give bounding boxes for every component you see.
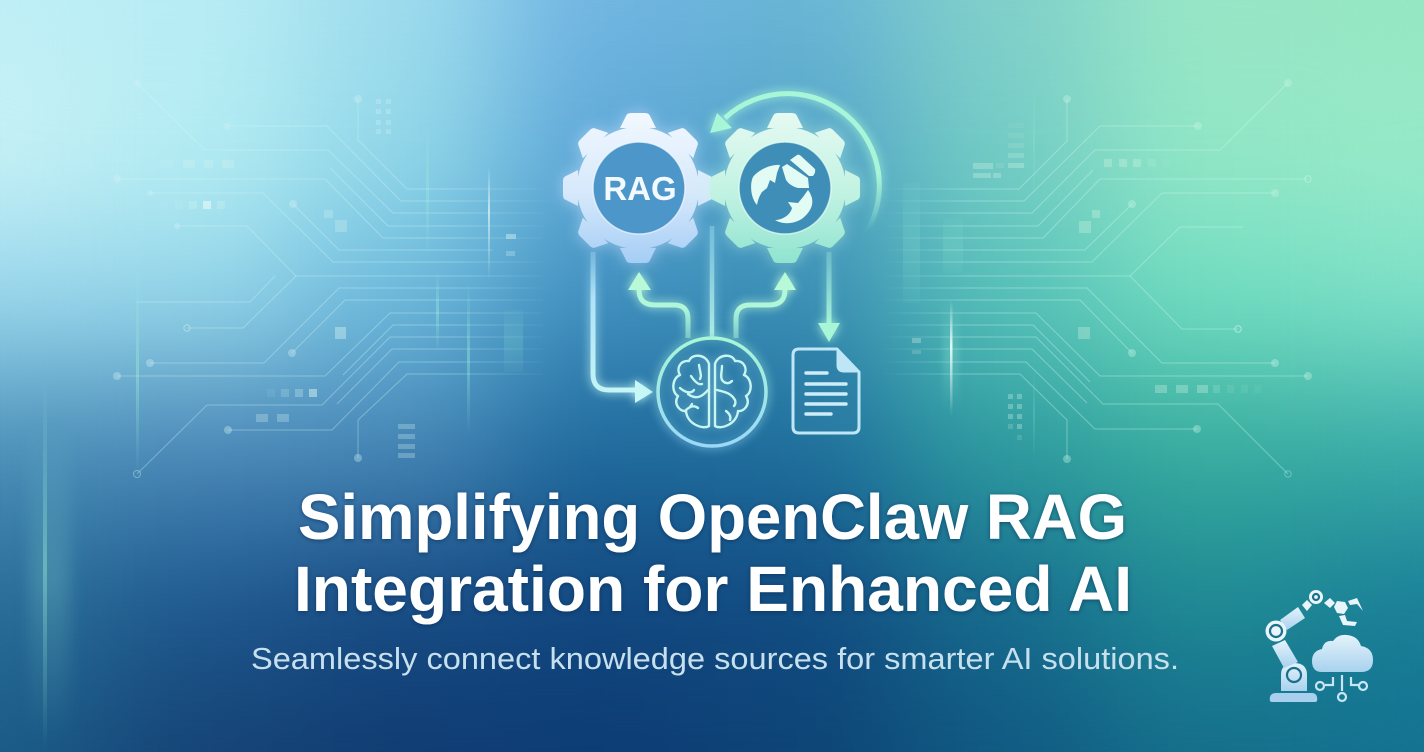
title: Simplifying OpenClaw RAG bbox=[298, 481, 1127, 553]
arrow: rag gear line down and into brain bbox=[593, 252, 653, 403]
circular arrow around claw gear bbox=[710, 94, 879, 248]
circuit nodes: right bbox=[1063, 79, 1312, 477]
gear: RAG bbox=[558, 108, 718, 268]
icon: brain bbox=[673, 356, 751, 427]
circuit traces: left bbox=[117, 83, 557, 474]
arrow: claw gear down to document bbox=[818, 252, 840, 342]
title bbox=[294, 481, 1132, 625]
soft glow streaks bbox=[30, 85, 1035, 752]
title: Integration for Enhanced AI bbox=[294, 553, 1132, 625]
circuit chips: left bbox=[160, 99, 516, 458]
gear label: RAG: RAG bbox=[603, 170, 677, 207]
gear: OpenClaw bbox=[705, 108, 865, 268]
subtitle: Seamlessly connect knowledge sources for smarter AI solutions. bbox=[251, 641, 1179, 676]
icon: robot arm and cloud bbox=[1266, 590, 1373, 702]
arrow: brain up to claw gear bbox=[736, 272, 796, 338]
circuit chips: right bbox=[912, 123, 1261, 440]
brain circle bbox=[658, 338, 766, 446]
robot arm bbox=[1266, 590, 1363, 702]
circuit under cloud bbox=[1316, 675, 1367, 701]
circuit traces: right bbox=[880, 83, 1308, 474]
icon: document bbox=[793, 349, 859, 433]
icon: claw mark bbox=[751, 155, 815, 223]
cloud bbox=[1312, 635, 1373, 672]
circuit nodes: left bbox=[113, 80, 362, 478]
arrow: brain stem to gears centre bbox=[710, 226, 714, 340]
arrow: brain up to rag gear bbox=[628, 272, 688, 338]
